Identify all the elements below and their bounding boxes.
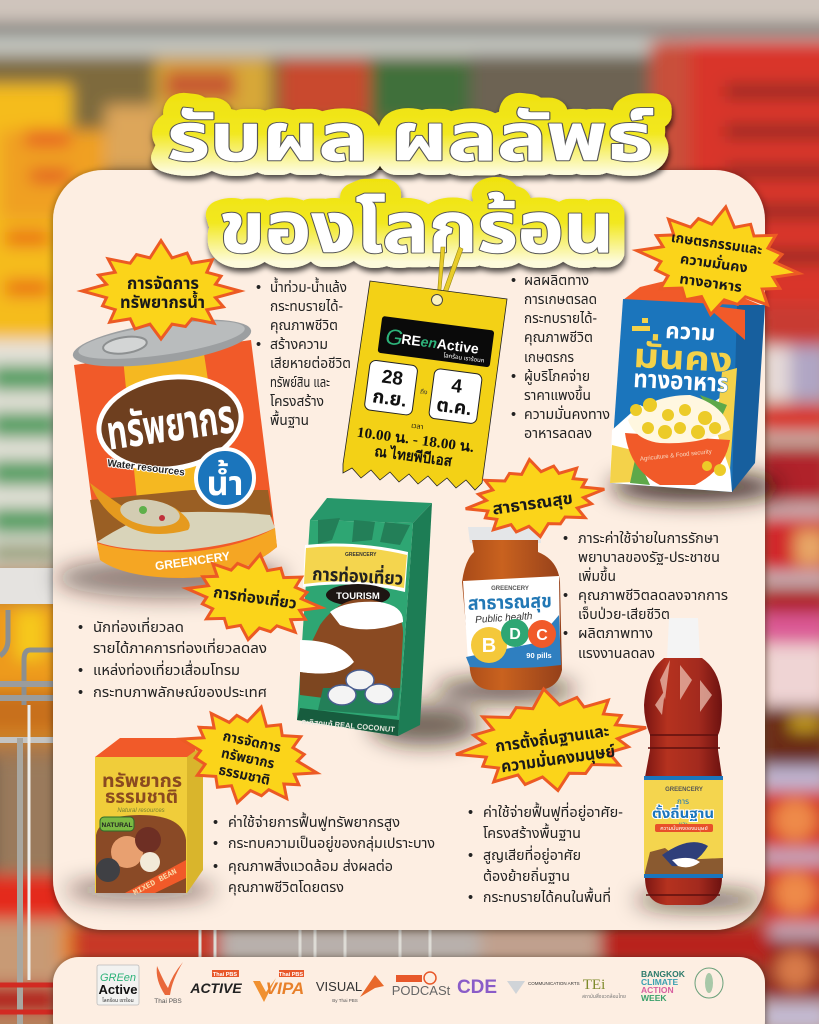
main panel [53, 170, 765, 930]
callout: natural resources: ทรัพยากร [220, 745, 276, 771]
product: water resources can: น้ำ [207, 459, 243, 503]
text: natural resources impacts: • [213, 859, 218, 875]
callout: agriculture: เกษตรกรรมและ [670, 229, 763, 258]
text: public health impacts: คุณภาพชีวิตลดลงจากการ [578, 588, 728, 604]
tag: connector: ถึง [419, 388, 428, 397]
logo: seal [695, 968, 723, 998]
callout: natural resources: การจัดการ [222, 728, 283, 755]
callout: natural resources [169, 690, 329, 820]
product: natural resources box: Natural resources [117, 808, 165, 814]
text: agriculture impacts: • [511, 273, 516, 289]
callout: water resources: การจัดการ [127, 275, 199, 293]
callout: agriculture [629, 195, 807, 326]
text: settlement impacts: • [468, 805, 473, 821]
product: public health pill bottle: GREENCERY [491, 586, 529, 592]
product: water resources can [70, 311, 277, 578]
text: settlement impacts: • [468, 890, 473, 906]
text: public health impacts: แรงงานลดลง [578, 646, 655, 662]
text: tourism impacts: แหล่งท่องเที่ยวเสื่อมโทรม [93, 660, 240, 679]
text: agriculture impacts [511, 273, 610, 442]
footer logos [97, 962, 723, 1005]
logo: Bangkok Climate Action Week: BANGKOK [641, 969, 686, 979]
text: natural resources impacts: กระทบความเป็นอยู่ของกลุ่มเปราะบาง [228, 835, 435, 852]
text: water impacts: ทรัพย์สิน และ [270, 375, 330, 391]
product: water resources can: ทรัพยากร [103, 390, 237, 461]
logo: Thai PBS: Thai PBS [154, 998, 182, 1005]
product: natural resources box: ธรรมชาติ [105, 787, 178, 808]
callout: natural resources: ธรรมชาติ [217, 761, 272, 788]
product: tourism carton: กะทิสดแท้ REAL COCONUT [301, 717, 396, 734]
tag: time and venue: เวลา [411, 423, 424, 431]
product: fish sauce bottle: GREENCERY [665, 787, 703, 793]
logo: Communication Arts [507, 981, 580, 994]
text: water impacts: กระทบรายได้- [270, 299, 343, 315]
callout: settlement and human security [449, 676, 653, 804]
tag: start date: 28 [380, 366, 404, 390]
product: fish sauce bottle: และ [679, 822, 687, 828]
text: water impacts: น้ำท่วม-น้ำแล้ง [270, 277, 347, 296]
callout: public health [460, 450, 610, 546]
text: agriculture impacts: • [511, 369, 516, 385]
logo: TEI [582, 977, 626, 1000]
text: tourism impacts: กระทบภาพลักษณ์ของประเทศ [93, 685, 267, 701]
product: tourism carton: TOURISM [336, 591, 380, 602]
product: natural resources box: MIXED BEAN [132, 867, 179, 898]
logo: VIPA [253, 970, 304, 1002]
product: water resources can: GREENCERY [154, 549, 231, 573]
logo: The Visual [316, 975, 384, 1003]
callout: tourism: การท่องเที่ยว [212, 580, 298, 613]
text: tourism impacts: • [78, 620, 83, 636]
text: water impacts: สร้างความ [270, 337, 328, 353]
logo: Bangkok Climate Action Week: WEEK [641, 993, 667, 1003]
tag: end date [428, 368, 483, 424]
logo: Bangkok Climate Action Week: CLIMATE [641, 977, 678, 987]
callout: tourism [181, 545, 327, 649]
product: natural resources box: ทรัพยากร [102, 771, 182, 792]
text: tourism impacts: รายได้ภาคการท่องเที่ยวลดลง [93, 638, 267, 657]
tag: time and venue: ณ ไทยพีบีเอส [373, 442, 453, 470]
text: settlement impacts: กระทบรายได้คนในพื้นที่ [483, 887, 611, 906]
text: agriculture impacts: กระทบรายได้- [524, 311, 597, 327]
product: fish sauce bottle: ตั้งถิ่นฐาน [652, 804, 714, 821]
text: settlement impacts: • [468, 848, 473, 864]
text: settlement impacts [468, 802, 623, 906]
logo: Bangkok Climate Action Week [641, 969, 686, 1003]
product: tourism carton: การท่องเที่ยว [312, 561, 404, 589]
text: water impacts: พื้นฐาน [270, 410, 309, 429]
callout: water resources: ทรัพยากรน้ำ [120, 290, 205, 312]
text: natural resources impacts: • [213, 815, 218, 831]
text: water impacts: เสียหายต่อชีวิต [270, 355, 351, 372]
product: food security box: มั่นคง [633, 332, 734, 380]
tag: end date: 4 [450, 376, 464, 398]
product: public health pill bottle: 90 pills [526, 651, 552, 660]
text: public health impacts: เพิ่มขึ้น [578, 566, 616, 585]
product: natural resources box [95, 738, 203, 898]
text: public health impacts: ภาระค่าใช้จ่ายในการรักษา [578, 530, 719, 547]
logo: Green Active: GREen [100, 972, 136, 984]
product shadows [55, 472, 780, 909]
tag: Green Active logo: REenActive [401, 331, 480, 357]
text: tourism impacts: นักท่องเที่ยวลด [93, 617, 184, 636]
text: public health impacts [563, 530, 728, 662]
tag: start date [364, 360, 418, 416]
product: food security box: ทางอาหาร [633, 365, 729, 398]
title line 2: ของโลกร้อน [219, 189, 614, 267]
text: public health impacts: ผลิตภาพทาง [578, 626, 653, 642]
text: natural resources impacts: ค่าใช้จ่ายการฟื้นฟูทรัพยากรสูง [228, 812, 400, 831]
text: tourism impacts: • [78, 663, 83, 679]
logo: The Active: ACTIVE [189, 980, 242, 996]
text: water impacts: • [256, 337, 261, 353]
logo: VIPA: Thai PBS [279, 972, 303, 978]
text: public health impacts: • [563, 626, 568, 642]
footer panel [53, 957, 765, 1024]
text: natural resources impacts: คุณภาพสิ่งแวดล้อม ส่งผลต่อ [228, 857, 393, 875]
text: agriculture impacts: ความมั่นคงทาง [524, 405, 610, 423]
title line 1: รับผล ผลลัพธ์ [167, 100, 653, 174]
text: natural resources impacts [213, 812, 435, 896]
logo: Green Active [97, 965, 139, 1005]
title line 2: ของโลกร้อน [219, 189, 614, 267]
logo: Podcast: PODCASt [392, 983, 451, 998]
text: water impacts: คุณภาพชีวิต [270, 318, 338, 334]
logo: VIPA: VIPA [266, 979, 304, 998]
text: agriculture impacts: ผลผลิตทาง [524, 273, 589, 289]
text: public health impacts: • [563, 588, 568, 604]
text: agriculture impacts: คุณภาพชีวิต [524, 330, 593, 346]
event tag [343, 247, 507, 490]
text: public health impacts: เจ็บป่วย-เสียชีวิต [578, 606, 670, 623]
text: water impacts [256, 277, 351, 429]
title line 2: ของโลกร้อน [219, 189, 614, 267]
tag: start date: ก.ย. [371, 386, 408, 412]
logo: Podcast [392, 972, 451, 998]
text: natural resources impacts: คุณภาพชีวิตโดยตรง [228, 880, 344, 896]
text: agriculture impacts: การเกษตรลด [524, 292, 597, 308]
text: agriculture impacts: • [511, 407, 516, 423]
product: tourism carton: GREENCERY [345, 552, 377, 558]
tag: Green Active logo: โลกร้อน เราร้อนก [443, 352, 485, 365]
product: natural resources box: NATURAL [102, 822, 132, 829]
callout: agriculture: ความมั่นคง [679, 249, 749, 276]
text: tourism impacts [78, 617, 267, 701]
logo: Green Active: Active [98, 982, 138, 997]
logo: TEI: TEi [583, 977, 605, 993]
text: tourism impacts: • [78, 685, 83, 701]
logo: The Visual: VISUAL [316, 979, 362, 994]
title line 1: รับผล ผลลัพธ์ [167, 100, 653, 174]
callout: agriculture: ทางอาหาร [678, 270, 743, 295]
product: public health pill bottle [462, 527, 562, 690]
product: fish sauce bottle: ความมั่นคงของมนุษย์ [660, 824, 708, 832]
text: agriculture impacts: ผู้บริโภคจ่าย [524, 368, 590, 385]
text: public health impacts: พยาบาลของรัฐ-ประชาชน [578, 550, 720, 566]
logo: Communication Arts: COMMUNICATION ARTS [528, 981, 580, 986]
callout: settlement and human security: การตั้งถิ่นฐานและ [494, 719, 611, 756]
logo: Green Active: โลกร้อน เราร้อน [102, 997, 134, 1004]
tag: time and venue [354, 416, 476, 473]
text: water impacts: โครงสร้าง [270, 394, 324, 410]
product: public health pill bottle: Public health [475, 611, 533, 626]
callout: settlement and human security: ความมั่นคงมนุษย์ [499, 739, 616, 776]
product: tourism carton [297, 498, 432, 736]
text: settlement impacts: ค่าใช้จ่ายฟื้นฟูที่อยู่อาศัย- [483, 802, 623, 821]
callout: public health: สาธารณสุข [491, 490, 574, 519]
text: settlement impacts: ต้องย้ายถิ่นฐาน [483, 867, 570, 885]
logo: The Active: Thai PBS [213, 972, 237, 978]
text: water impacts: • [256, 280, 261, 296]
product: food security box [610, 275, 765, 492]
logo: TEI: สถาบันสิ่งแวดล้อมไทย [582, 992, 626, 1000]
tag: end date: ต.ค. [435, 395, 473, 420]
product: public health pill bottle: สาธารณสุข [467, 591, 552, 615]
product: fish sauce bottle [644, 618, 723, 905]
text: agriculture impacts: ราคาแพงขึ้น [524, 385, 591, 404]
product: public health pill bottle: D [509, 626, 521, 643]
text: agriculture impacts: เกษตรกร [524, 350, 574, 366]
product: food security box: Agriculture & Food security [640, 449, 712, 463]
product: public health pill bottle: B [482, 635, 496, 657]
logo: Thai PBS [154, 962, 183, 1005]
tag: Green Active logo: G [384, 324, 404, 351]
text: natural resources impacts: • [213, 836, 218, 852]
logo: The Visual: By Thai PBS [332, 998, 358, 1003]
shopping cart wires [0, 568, 430, 1024]
tag: time and venue: 10.00 น. - 18.00 น. [356, 425, 475, 456]
title line 1: รับผล ผลลัพธ์ [167, 100, 653, 174]
text: public health impacts: • [563, 531, 568, 547]
callout: water resources [82, 241, 240, 339]
product: public health pill bottle: C [536, 627, 548, 644]
product: water resources can: Water resources [107, 458, 186, 479]
tag: Green Active logo [378, 316, 494, 367]
text: agriculture impacts: อาหารลดลง [524, 426, 592, 442]
product: food security box: ความ [665, 318, 716, 346]
text: settlement impacts: สูญเสียที่อยู่อาศัย [483, 845, 581, 864]
text: settlement impacts: โครงสร้างพื้นฐาน [483, 823, 581, 842]
logo: The Active [189, 970, 242, 996]
logo: CDE: CDE [457, 977, 497, 998]
logo: Bangkok Climate Action Week: ACTION [641, 985, 674, 995]
product: fish sauce bottle: การ [677, 797, 689, 806]
